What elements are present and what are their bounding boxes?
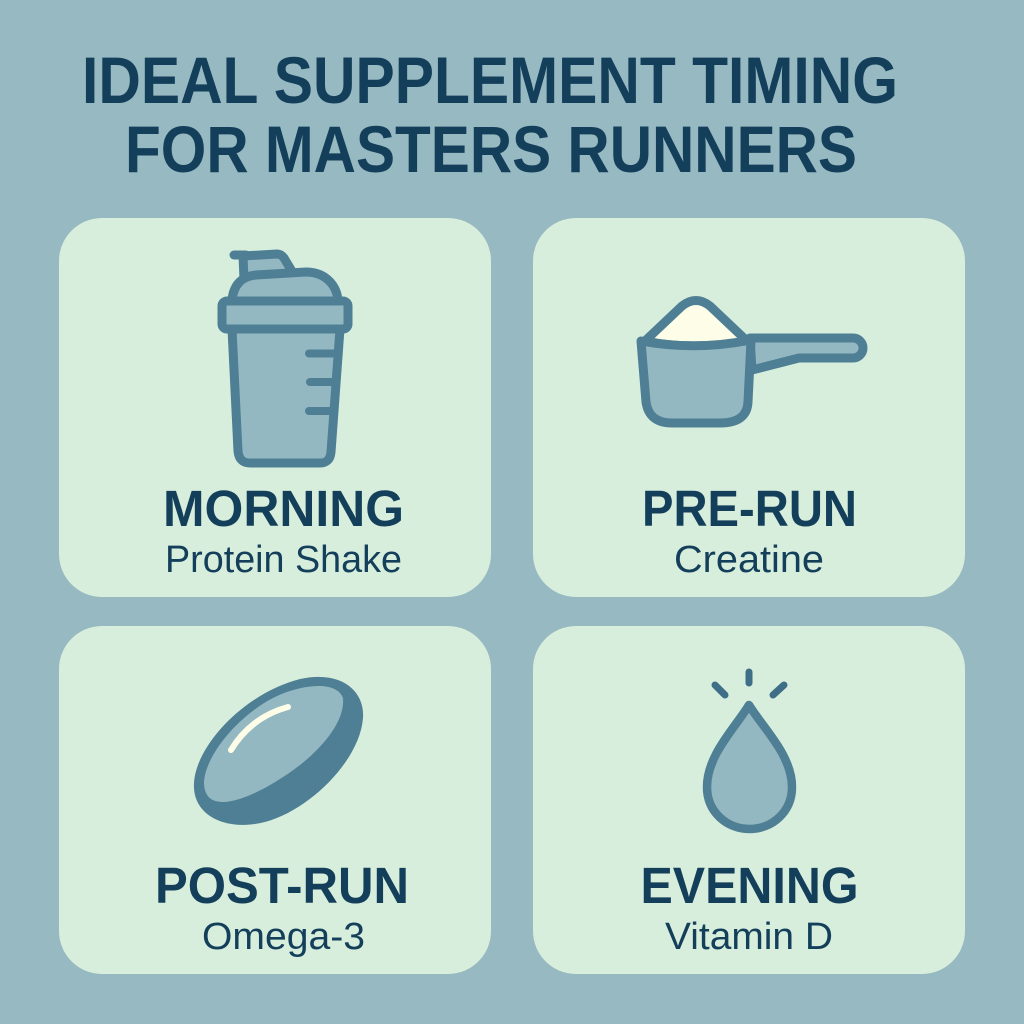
icon: creatine scoop	[636, 296, 868, 428]
text: protein shake: Protein Shake	[165, 539, 402, 581]
icon: vitamin D drop	[702, 668, 796, 834]
title: IDEAL SUPPLEMENT TIMING	[82, 43, 898, 117]
panel: post-run	[59, 626, 491, 974]
heading: evening: EVENING	[640, 857, 858, 914]
panel: pre-run	[533, 218, 965, 597]
text: omega-3: Omega-3	[202, 916, 365, 958]
text: creatine: Creatine	[674, 539, 824, 581]
title	[82, 43, 898, 186]
panel: morning	[59, 218, 491, 597]
heading: morning: MORNING	[163, 480, 404, 537]
panel: evening	[533, 626, 965, 974]
heading: post-run: POST-RUN	[155, 857, 409, 914]
icon: omega-3 capsule	[194, 676, 364, 825]
title: FOR MASTERS RUNNERS	[125, 112, 857, 186]
icon: shaker bottle	[218, 250, 352, 468]
heading: pre-run: PRE-RUN	[642, 480, 857, 537]
text: vitamin D: Vitamin D	[665, 916, 833, 958]
